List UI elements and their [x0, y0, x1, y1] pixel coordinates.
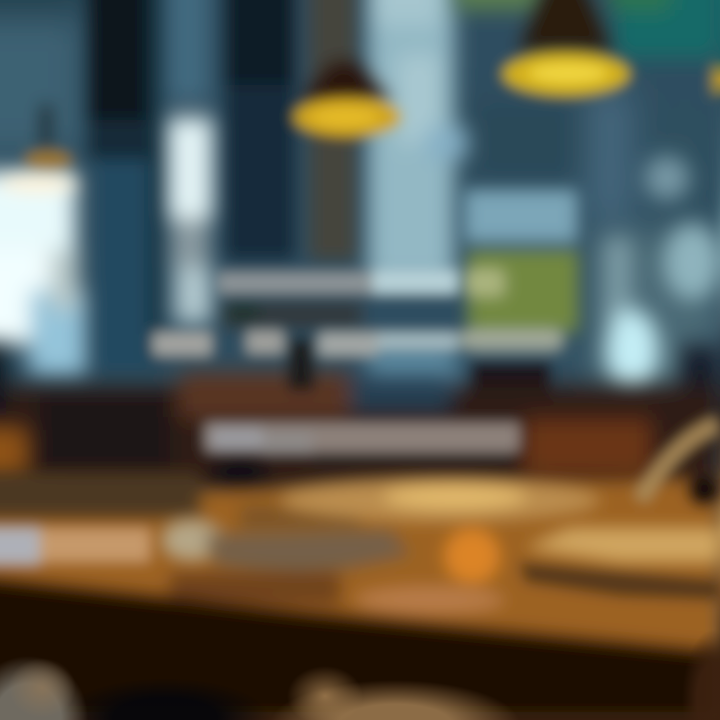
blurred overlay line: caption lower [204, 422, 520, 466]
lower light wood [355, 586, 505, 614]
lamp: pendant edge right [712, 64, 720, 96]
centre shaded wood [170, 572, 340, 604]
top right teal sign [455, 0, 720, 58]
bright tray top centre [280, 479, 600, 521]
left shaded surface [0, 472, 200, 518]
right bright reflections [605, 156, 720, 410]
dark box behind counter [472, 362, 550, 404]
outdoor view: sky and green field [465, 190, 578, 350]
dark pillars [88, 0, 356, 370]
counter band: brown furniture [0, 345, 720, 495]
paper blob [162, 520, 222, 560]
lamp: pendant centre-left [293, 62, 401, 137]
centre book [205, 530, 410, 578]
orange glow [444, 528, 500, 584]
tray highlight [383, 485, 527, 509]
right book top [525, 528, 720, 562]
upper centre wood band [240, 505, 360, 531]
left paper strip [0, 528, 150, 562]
blurred overlay line: title top [218, 270, 500, 294]
lamp: pendant far left [0, 105, 76, 193]
left paper glare [0, 528, 40, 564]
upper background tones [0, 0, 720, 400]
central light blue window [368, 0, 467, 400]
narrow window slot between pillars [168, 0, 212, 323]
shadow under title line [222, 302, 362, 328]
table underside [0, 575, 720, 720]
right book side [520, 562, 720, 600]
dark gap behind arm [688, 474, 720, 506]
curved brass arm at right [640, 424, 718, 500]
blurred overlay line: subtitle middle flecks [152, 330, 560, 390]
left bright window [0, 172, 85, 375]
table surface details [0, 472, 720, 614]
table top [0, 478, 720, 720]
dark ink blob under lower bar [214, 460, 266, 496]
lamp: pendant right [502, 0, 630, 96]
